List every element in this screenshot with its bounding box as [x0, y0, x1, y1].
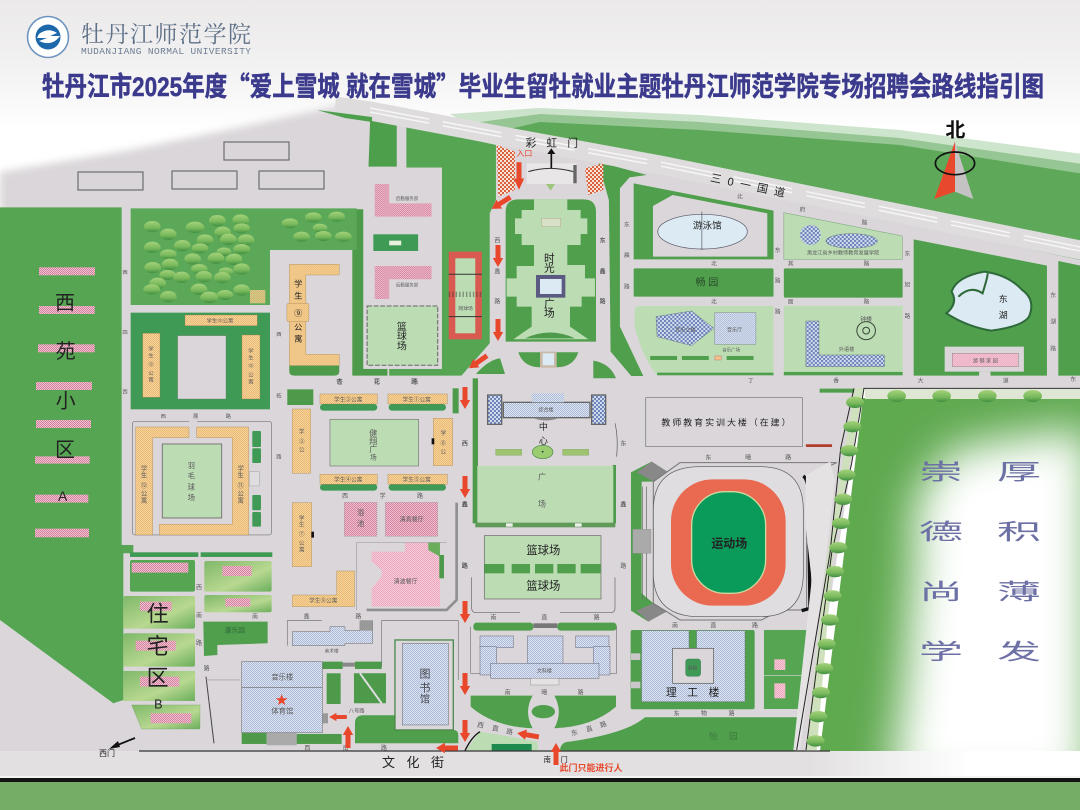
dormitories 1-8 plaza block: 西: [342, 493, 348, 500]
swimming hall: [658, 212, 747, 250]
science building and east fields: 物: [701, 709, 707, 717]
east campus blocks: 路: [775, 308, 781, 316]
dormitories 1-8 plaza block: 花: [374, 378, 380, 386]
motto text: 德: [919, 520, 963, 544]
east road and tree line: [793, 388, 1080, 750]
woods and north dorm block: ⑬: [248, 362, 254, 370]
east campus blocks: 北: [711, 259, 717, 267]
basketball courts, arts building, south garden: 园: [729, 731, 738, 741]
dormitories 1-8 plaza block: 学: [299, 514, 305, 522]
art building, music hall, gymnasium, library: 路: [204, 665, 210, 673]
dormitories 1-8 plaza block: 鑫: [462, 501, 468, 509]
dormitories 1-8 plaza block: 学生④公寓: [334, 475, 363, 483]
east lake: 东: [999, 293, 1008, 304]
west garden residential area A: [0, 207, 133, 703]
north entrance gate: 彩: [526, 138, 537, 150]
east campus blocks: 音乐厅: [727, 327, 742, 334]
gymnasium star marker: [276, 694, 288, 705]
basketball courts, arts building, south garden: 篮球场: [526, 579, 560, 593]
residential area B: 南: [196, 611, 202, 619]
woods and north dorm block: 四: [122, 329, 128, 336]
green belt north of highway: [450, 108, 1080, 262]
badminton court and dorms 11-12: 生: [237, 470, 244, 479]
east campus blocks: 东: [775, 246, 781, 254]
national highway 301: 三0一国道: [709, 170, 786, 200]
dormitories 1-8 plaza block: ③: [299, 437, 305, 445]
residential area B: 区: [147, 666, 169, 691]
basketball courts, arts building, south garden: 文科楼: [537, 667, 552, 674]
dorm 9 and logistics buildings: [287, 168, 482, 385]
east campus blocks: 东: [1050, 291, 1056, 299]
woods and north dorm block: [122, 208, 357, 461]
badminton court and dorms 11-12: 公: [237, 491, 244, 498]
empty lot rectangles: [78, 142, 324, 190]
east campus blocks: 路: [864, 259, 870, 267]
dormitories 1-8 plaza block: 学生⑧公寓: [309, 597, 338, 605]
time plaza north loop: 光: [544, 261, 555, 274]
west gate arrow: [99, 738, 135, 758]
east campus blocks: 游 钢 家 园: [973, 357, 998, 364]
central plaza: 东: [620, 439, 626, 447]
residential area B: 南: [252, 613, 258, 621]
woods and north dorm block: 寓: [148, 376, 154, 384]
dormitories 1-8 plaza block: 广: [369, 444, 377, 454]
dormitories 1-8 plaza block: 学: [380, 492, 386, 500]
south gate label: 门: [560, 755, 568, 764]
residential area B: [123, 552, 272, 729]
dorm 9 and logistics buildings: 篮: [397, 320, 407, 333]
woods and north dorm block: 西: [161, 413, 166, 420]
badminton court and dorms 11-12: 毛: [188, 472, 196, 481]
university name: MUDANJIANG NORMAL UNIVERSITY: [81, 46, 251, 57]
dormitories 1-8 plaza block: 寓: [299, 546, 305, 554]
art building, music hall, gymnasium, library: 八号路: [349, 706, 365, 714]
central plaza: 鑫: [462, 501, 468, 509]
badminton court and dorms 11-12: 公: [141, 491, 148, 498]
central plaza: 西: [462, 441, 468, 448]
basketball courts, arts building, south garden: 路: [598, 719, 608, 730]
woods and north dorm block: 展: [193, 413, 199, 420]
dormitories 1-8 plaza block: 学生①公寓: [402, 395, 431, 403]
science building and east fields: [631, 621, 807, 717]
art building, music hall, gymnasium, library: 美术楼: [325, 647, 339, 654]
dormitories 1-8 plaza block: 场: [370, 452, 377, 461]
campus ground: [0, 103, 1080, 751]
east campus blocks: 路: [905, 312, 911, 320]
science building and east fields: 理工楼: [666, 686, 720, 699]
central plaza: 鑫: [620, 501, 626, 509]
south gate label: 南: [544, 755, 551, 764]
woods and north dorm block: 拓: [276, 391, 282, 399]
north compass: 北: [945, 120, 966, 142]
woods and north dorm block: ⑫: [148, 360, 154, 368]
woods and north dorm block: 路: [276, 453, 282, 461]
east campus blocks: 音乐广场: [722, 347, 741, 354]
dorm 9 and logistics buildings: 杏: [336, 377, 342, 385]
science building and east fields: 路: [729, 709, 735, 717]
time plaza north loop: 时: [544, 252, 555, 265]
east lake: [946, 272, 1031, 331]
woods and north dorm block: 学: [148, 345, 154, 353]
woods and north dorm block: 公: [248, 373, 254, 379]
east campus blocks: 香: [833, 377, 839, 385]
dormitories 1-8 plaza block: 西: [462, 440, 468, 447]
basketball courts, arts building, south garden: 直: [491, 723, 500, 733]
art building, music hall, gymnasium, library: 路: [381, 744, 387, 752]
basketball courts, arts building, south garden: 南: [490, 613, 496, 621]
basketball courts, arts building, south garden: [462, 501, 798, 752]
dorm 9 and logistics buildings: 后勤服务部: [396, 282, 419, 289]
dorm 9 and logistics buildings: ⑨: [294, 309, 302, 318]
east campus blocks: 钟楼: [860, 315, 872, 323]
dorm 9 and logistics buildings: 公: [294, 323, 302, 332]
basketball courts, arts building, south garden: 曦: [541, 688, 547, 696]
badminton court and dorms 11-12: [132, 418, 272, 535]
east campus blocks: 畅 园: [696, 276, 719, 289]
woods and north dorm block: 学: [248, 346, 254, 354]
south gate label: [544, 755, 568, 764]
dormitories 1-8 plaza block: 池: [357, 519, 365, 528]
time plaza north loop: 场: [544, 307, 555, 320]
east campus blocks: 其: [788, 259, 794, 267]
basketball courts, arts building, south garden: 路: [462, 562, 468, 570]
east campus blocks: 面: [788, 299, 794, 306]
east campus blocks: 黑龙江省乡村教师教育发展学院: [807, 250, 879, 257]
woods and north dorm block: 学生⑬公寓: [207, 316, 233, 324]
east campus blocks: 旭: [905, 280, 911, 288]
university name: 牡丹江师范学院: [81, 22, 251, 47]
dormitories 1-8 plaza block: 路: [355, 613, 361, 621]
badminton court and dorms 11-12: 寓: [237, 495, 244, 504]
east campus blocks: 府: [800, 205, 806, 213]
north compass: [934, 120, 975, 199]
dormitories 1-8 plaza block: ⑥: [440, 439, 446, 447]
central plaza: 中: [539, 421, 548, 432]
east campus blocks: 路: [600, 297, 606, 305]
motto text: 学: [919, 640, 963, 664]
time plaza north loop: 路: [600, 297, 606, 305]
dormitories 1-8 plaza block: ⑦: [299, 530, 305, 538]
central plaza: 综合楼: [539, 406, 553, 413]
dormitories 1-8 plaza block: [287, 378, 468, 621]
stadium: 东: [705, 453, 711, 461]
motto text: 积: [997, 520, 1041, 544]
right-hand green lawn with motto background: [820, 398, 1080, 790]
woods and north dorm block: 路: [226, 412, 232, 420]
woods and north dorm block: 寓: [248, 377, 254, 385]
dormitories 1-8 plaza block: 学生⑤公寓: [402, 475, 431, 483]
east campus blocks: 丁: [748, 378, 754, 385]
motto text: 崇: [919, 460, 963, 484]
east campus blocks: 东: [905, 249, 911, 257]
basketball courts, arts building, south garden: 路: [594, 613, 600, 621]
art building, music hall, gymnasium, library: 体育馆: [271, 706, 293, 715]
dormitories 1-8 plaza block: 杏: [337, 378, 343, 386]
dorm 9 and logistics buildings: 后勤服务部: [396, 195, 419, 202]
east campus blocks: 东: [624, 220, 630, 228]
motto text: 尚: [919, 580, 963, 604]
art building, music hall, gymnasium, library: 图: [419, 667, 430, 680]
green lawns around west road: [352, 117, 496, 376]
central plaza: 广: [538, 471, 546, 481]
motto text: 厚: [997, 460, 1041, 484]
basketball courts, arts building, south garden: 西: [476, 721, 485, 730]
west gate arrow: 西门: [99, 748, 115, 758]
dormitories 1-8 plaza block: 学: [299, 427, 305, 435]
east campus blocks: 路: [624, 283, 630, 291]
science building and east fields: 南: [672, 621, 678, 629]
dorm 9 and logistics buildings: 学: [294, 279, 302, 289]
science building and east fields: 静园: [688, 664, 698, 671]
basketball courts, arts building, south garden: 东: [570, 727, 579, 738]
dorm 9 and logistics buildings: 路: [412, 377, 418, 385]
east campus blocks: 路: [862, 219, 868, 227]
south boundary road Wenhua Street: [0, 751, 1080, 778]
swimming hall: 游泳馆: [693, 219, 722, 231]
badminton court and dorms 11-12: 学: [237, 464, 244, 473]
woods and north dorm block: 西: [276, 331, 282, 338]
time plaza north loop: 西: [494, 238, 500, 245]
east campus blocks: 外语楼: [839, 346, 854, 353]
west garden residential area A: 小: [56, 389, 76, 412]
north entrance gate: 虹: [546, 138, 557, 150]
time plaza north loop: 东: [600, 237, 606, 245]
bottom band: [0, 776, 1080, 810]
art building, music hall, gymnasium, library: 书: [419, 681, 430, 694]
residential area B: 住: [147, 601, 169, 626]
west garden residential area A: A: [58, 488, 68, 504]
badminton court and dorms 11-12: 羽: [188, 461, 195, 470]
art building, music hall, gymnasium, library: [204, 621, 458, 752]
north entrance gate: [497, 137, 603, 197]
east campus blocks: 音乐之楼: [675, 327, 696, 334]
east campus blocks: 道: [1003, 377, 1009, 385]
dormitories 1-8 plaza block: 公: [299, 540, 305, 547]
east lake: 湖: [999, 310, 1008, 320]
national highway 301: [317, 106, 1080, 253]
basketball courts, arts building, south garden: 路: [620, 562, 626, 570]
dormitories 1-8 plaza block: 生: [299, 521, 305, 529]
art building, music hall, gymnasium, library: 南: [343, 744, 349, 752]
dormitories 1-8 plaza block: 路: [411, 378, 417, 386]
dormitories 1-8 plaza block: 翔: [369, 436, 377, 446]
north entrance gate: 入口: [516, 149, 532, 158]
dormitories 1-8 plaza block: 学: [440, 429, 446, 437]
time plaza north loop: 路: [494, 297, 500, 305]
east campus blocks: 湖: [1050, 318, 1056, 326]
motto text: [919, 460, 1041, 664]
east campus blocks: 晨: [624, 252, 630, 259]
roundabout islands: [476, 352, 616, 378]
badminton court and dorms 11-12: ⑫: [141, 482, 148, 490]
teacher education training building: 教师教育实训大楼（在建）: [661, 416, 791, 427]
art building, music hall, gymnasium, library: 音乐楼: [271, 672, 294, 681]
dormitories 1-8 plaza block: 清波餐厅: [394, 577, 418, 585]
badminton court and dorms 11-12: 学: [141, 464, 147, 473]
basketball courts, arts building, south garden: 路: [506, 727, 514, 736]
east campus blocks: 路: [864, 298, 870, 306]
science building and east fields: 路: [752, 621, 758, 629]
basketball courts, arts building, south garden: 直: [541, 613, 547, 621]
central plaza: [462, 378, 626, 527]
dormitories 1-8 plaza block: 鑫: [304, 613, 310, 621]
badminton court and dorms 11-12: 球: [188, 482, 196, 491]
residential area B: 宅: [147, 634, 169, 659]
dorm 9 and logistics buildings: 花: [374, 377, 380, 385]
central plaza: 场: [538, 500, 546, 509]
east campus blocks: 鑫: [600, 267, 606, 275]
badminton court and dorms 11-12: 生: [141, 470, 147, 479]
stadium: [631, 453, 837, 622]
east campus blocks: 路: [1050, 344, 1056, 352]
badminton court and dorms 11-12: 寓: [141, 495, 147, 504]
east campus blocks: [599, 163, 1080, 447]
time plaza north loop: 广: [544, 298, 555, 310]
dormitories 1-8 plaza block: 清真餐厅: [400, 515, 424, 523]
science building and east fields: 东: [674, 709, 680, 717]
pedestrian-only notice: 此门只能进行人: [559, 762, 623, 773]
dorm 9 and logistics buildings: 寓: [294, 334, 302, 344]
dorm 9 and logistics buildings: 网球场: [458, 305, 473, 312]
dorm 9 and logistics buildings: 球: [397, 330, 407, 343]
route arrows: [329, 162, 561, 765]
stadium: 路: [785, 453, 791, 461]
east campus blocks: 东: [600, 237, 606, 245]
residential area B: 西: [196, 584, 202, 591]
time plaza north loop: 鑫: [494, 267, 500, 275]
stadium: 运动场: [711, 537, 747, 551]
art building, music hall, gymnasium, library: 馆: [420, 693, 430, 706]
art building, music hall, gymnasium, library: 西: [304, 745, 310, 752]
residential area B: 康乐园: [225, 626, 245, 635]
basketball courts, arts building, south garden: 路: [578, 688, 584, 696]
west garden residential area A: 区: [55, 440, 75, 462]
basketball courts, arts building, south garden: 鑫: [620, 501, 626, 509]
dormitories 1-8 plaza block: 公: [440, 448, 446, 455]
time plaza north loop: 鑫: [600, 267, 606, 275]
motto text: 薄: [997, 580, 1041, 604]
dorm 9 and logistics buildings: 场: [397, 339, 407, 352]
stadium: 曦: [745, 453, 751, 461]
basketball courts, arts building, south garden: 鑫: [462, 501, 468, 509]
west garden residential area A: 苑: [56, 340, 76, 363]
dorm 9 and logistics buildings: 生: [294, 290, 302, 300]
woods and north dorm block: 生: [148, 352, 154, 360]
west garden residential area A: 西: [55, 292, 75, 314]
dormitories 1-8 plaza block: 浴: [357, 508, 365, 517]
east campus blocks: 大: [918, 377, 924, 385]
east campus blocks: 北: [711, 298, 717, 306]
basketball courts, arts building, south garden: 南: [505, 688, 511, 696]
badminton court and dorms 11-12: 场: [188, 493, 195, 502]
dormitories 1-8 plaza block: 公: [299, 447, 305, 454]
dormitories 1-8 plaza block: 健: [369, 428, 377, 438]
time plaza north loop: [476, 199, 616, 378]
central plaza: 心: [539, 436, 548, 446]
east campus blocks: 北: [737, 193, 743, 201]
woods and north dorm block: 西: [122, 388, 128, 395]
south boundary road Wenhua Street: 文化街: [382, 755, 444, 770]
teacher education training building: [646, 398, 802, 447]
badminton court and dorms 11-12: ⑪: [237, 482, 244, 490]
north entrance gate: 门: [567, 137, 578, 150]
residential area B: 路: [196, 639, 202, 647]
woods and north dorm block: 生: [248, 353, 254, 361]
woods and north dorm block: 西: [122, 269, 128, 276]
east campus blocks: 东: [1070, 375, 1076, 383]
woods and north dorm block: 公: [148, 371, 154, 377]
motto text: 发: [997, 640, 1041, 664]
residential area B: B: [154, 697, 163, 711]
university logo: [28, 16, 68, 58]
dormitories 1-8 plaza block: 路: [462, 562, 468, 570]
basketball courts, arts building, south garden: 篮球场: [526, 543, 560, 557]
dormitories 1-8 plaza block: 学生②公寓: [334, 395, 363, 403]
dormitories 1-8 plaza block: 路: [417, 492, 423, 500]
science building and east fields: 直: [710, 621, 716, 629]
basketball courts, arts building, south garden: 怡: [709, 730, 718, 741]
east campus blocks: 路: [775, 277, 781, 285]
basketball courts, arts building, south garden: 直: [585, 723, 594, 734]
